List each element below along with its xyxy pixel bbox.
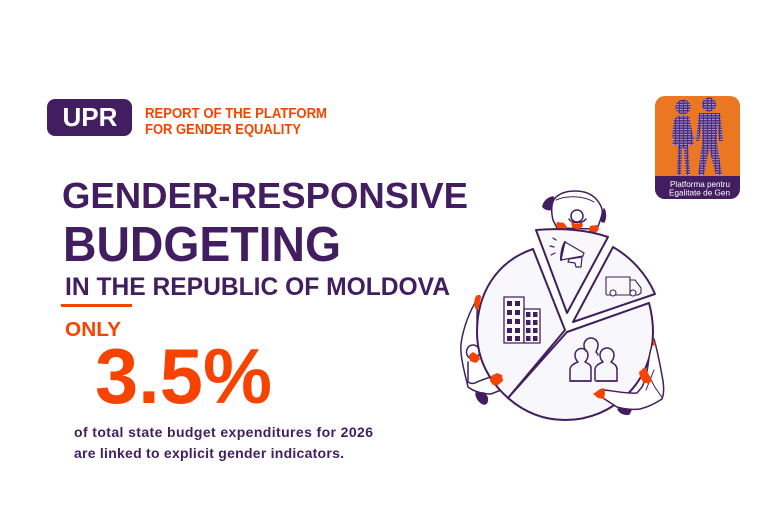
logo caption <box>669 179 730 198</box>
bottom pie slice with people <box>508 303 653 420</box>
icon: megaphone <box>550 238 584 267</box>
UPR badge: UPR <box>62 102 118 132</box>
title: IN THE REPUBLIC OF MOLDOVA <box>65 273 450 301</box>
only label: ONLY <box>65 319 122 341</box>
statistic description: are linked to explicit gender indicators. <box>74 445 344 461</box>
icon: group of people <box>570 338 617 381</box>
top pie slice with megaphone <box>536 229 608 313</box>
icon: buildings <box>504 297 540 343</box>
report label <box>145 106 327 138</box>
person right <box>593 339 664 414</box>
title: BUDGETING <box>63 218 341 272</box>
title: GENDER-RESPONSIVE <box>62 175 468 216</box>
right pie slice with truck <box>573 247 655 322</box>
statistic description <box>74 424 373 461</box>
left pie slice with building <box>477 249 565 398</box>
logo caption: Platforma pentru <box>670 179 730 189</box>
logo caption: Egalitate de Gen <box>669 188 730 198</box>
person top with headset <box>543 191 606 234</box>
report label: REPORT OF THE PLATFORM <box>145 106 327 122</box>
UPR badge <box>47 99 132 136</box>
person left <box>461 298 501 404</box>
woman figure <box>672 100 696 175</box>
title <box>62 175 468 301</box>
statistic description: of total state budget expenditures for 2026 <box>74 424 373 440</box>
accent rule <box>61 304 132 307</box>
man figure <box>696 98 723 175</box>
icon: truck <box>606 277 641 296</box>
report label: FOR GENDER EQUALITY <box>145 122 301 138</box>
statistic 3.5%: 3.5% <box>95 332 272 420</box>
left hands <box>474 295 503 385</box>
pie illustration <box>461 191 664 420</box>
logo: Platforma pentru Egalitate de Gen <box>655 96 740 199</box>
